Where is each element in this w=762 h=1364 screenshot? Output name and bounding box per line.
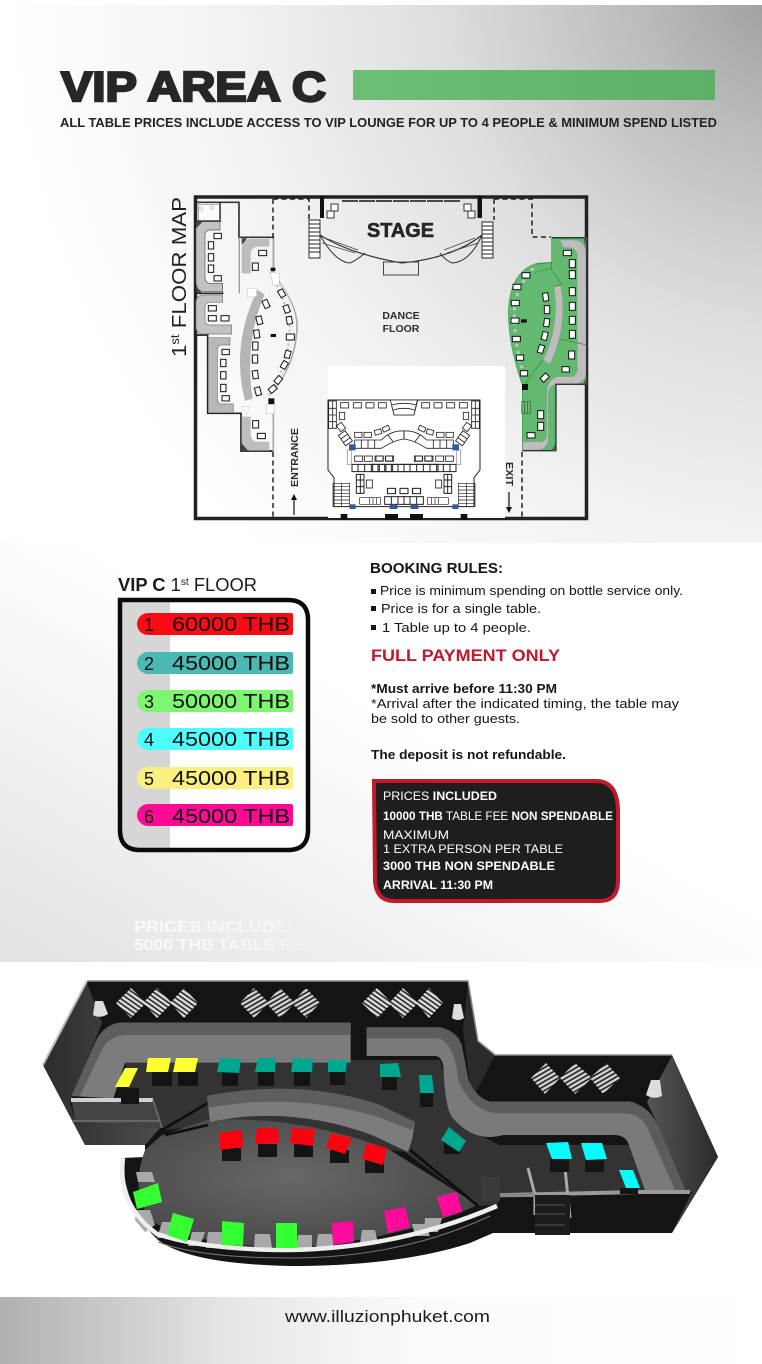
price rows <box>137 613 293 828</box>
upper right banquette <box>367 1027 685 1190</box>
prices included box: MAXIMUM <box>383 830 449 842</box>
booking rules: Price is for a single table. <box>381 601 541 616</box>
prices included box: PRICES INCLUDED <box>383 791 497 803</box>
price rows: 50000 THB <box>172 691 290 713</box>
tables: cyan <box>546 1142 640 1188</box>
front rails <box>71 1098 153 1102</box>
price rows: 4 <box>144 730 154 750</box>
faint ghost text <box>134 919 314 954</box>
subtitle: ALL TABLE PRICES INCLUDE ACCESS TO VIP LOUNGE FOR UP TO 4 PEOPLE & MINIMUM SPEND LISTED <box>60 115 717 130</box>
lobe floor <box>139 1119 478 1248</box>
floor map heading: 1 <box>168 346 191 357</box>
arrival notes: be sold to other guests. <box>371 711 520 726</box>
entrance marker <box>290 428 301 515</box>
seats on balcony <box>135 1172 442 1250</box>
prices included box <box>374 781 618 901</box>
prices included box: 1 EXTRA PERSON PER TABLE <box>383 844 563 856</box>
centre banquette <box>207 1089 415 1152</box>
exit marker: EXIT <box>503 462 514 486</box>
dance floor label <box>382 310 420 335</box>
price panel heading: FLOOR <box>189 575 257 595</box>
booking rules <box>370 561 683 635</box>
price rows: 45000 THB <box>172 729 290 751</box>
arrival notes: *Must arrive before 11:30 PM <box>371 681 557 696</box>
prices included box: 3000 THB NON SPENDABLE <box>383 861 555 873</box>
arrival notes: *Arrival after the indicated timing, the table may <box>371 696 680 711</box>
arrival notes <box>371 681 680 762</box>
tables: magenta <box>332 1192 462 1245</box>
price panel heading: st <box>181 577 189 588</box>
price rows: 45000 THB <box>172 768 290 790</box>
entrance marker: ENTRANCE <box>290 428 301 487</box>
building shell <box>43 981 718 1266</box>
floor map <box>196 196 587 520</box>
full payment notice: FULL PAYMENT ONLY <box>371 646 561 665</box>
price rows: 3 <box>144 692 154 712</box>
balcony rail <box>122 1158 497 1250</box>
floor map heading: st <box>168 334 182 345</box>
left VIP area plan <box>196 202 297 452</box>
price rows: 45000 THB <box>172 806 290 828</box>
price rows: 2 <box>144 654 154 674</box>
main floor <box>125 1060 660 1206</box>
price panel heading: VIP C 1 <box>118 575 181 595</box>
website: www.illuzionphuket.com <box>284 1307 490 1326</box>
booking rules: Price is minimum spending on bottle service only. <box>380 583 683 598</box>
left stair landing <box>72 1102 162 1128</box>
title: VIP AREA C <box>61 63 326 110</box>
floor map heading: FLOOR MAP <box>168 197 191 334</box>
tables: yellow <box>115 1058 198 1087</box>
booking rules: 1 Table up to 4 people. <box>382 620 531 635</box>
tables: red <box>219 1128 387 1165</box>
faint ghost text: PRICES INCLUDED <box>134 919 300 936</box>
tables: teal <box>217 1058 466 1152</box>
price rows: 60000 THB <box>172 614 290 636</box>
green title bar <box>353 70 715 100</box>
arrival notes: The deposit is not refundable. <box>371 747 566 762</box>
stage label: STAGE <box>367 219 434 242</box>
dance floor label: DANCE <box>382 310 420 322</box>
faint ghost text: 5000 THB TABLE FEE <box>134 937 314 954</box>
booking rules: BOOKING RULES: <box>370 561 503 577</box>
price rows: 45000 THB <box>172 653 290 675</box>
central VIP plan <box>328 400 480 520</box>
VIP C green area plan <box>508 238 587 451</box>
footer bar <box>0 1297 762 1364</box>
wall art <box>116 988 620 1094</box>
price panel <box>118 575 308 850</box>
upper left banquette <box>72 1023 351 1098</box>
price rows: 1 <box>144 615 154 635</box>
stage <box>309 196 493 275</box>
lamps <box>93 1001 108 1017</box>
table bases <box>121 1072 638 1194</box>
prices included box: ARRIVAL 11:30 PM <box>383 880 493 892</box>
dance floor label: FLOOR <box>383 323 420 335</box>
prices included box: 10000 THB TABLE FEE NON SPENDABLE <box>383 811 613 823</box>
price rows: 5 <box>144 769 154 789</box>
price rows: 6 <box>144 807 154 827</box>
dashed zone lines <box>273 199 551 517</box>
exit marker <box>503 462 514 513</box>
3D venue render <box>43 981 718 1266</box>
tables: green <box>133 1183 297 1248</box>
